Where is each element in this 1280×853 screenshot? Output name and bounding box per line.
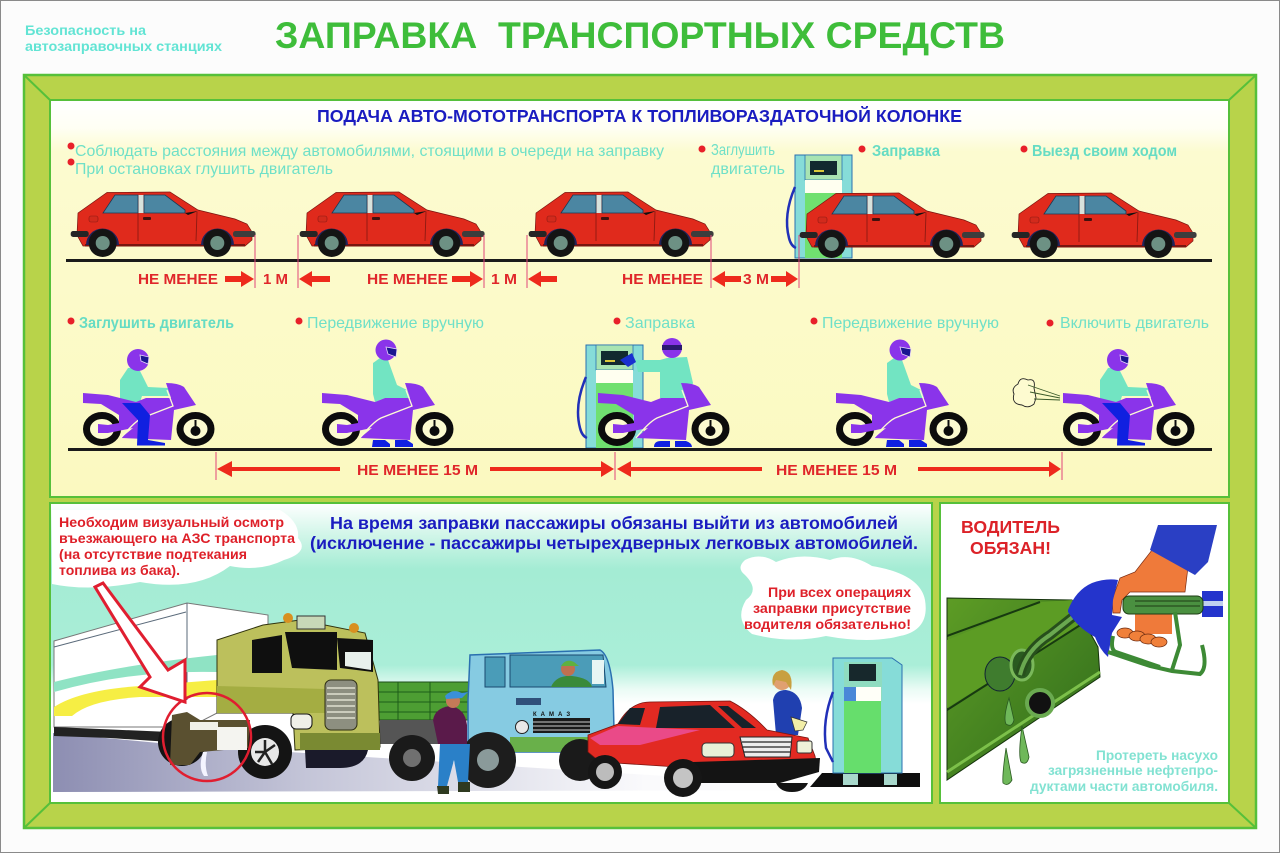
car row instructions: Заправка [872,143,940,160]
car 4 at pump [800,193,985,258]
icon: fuel pump, car row [787,155,852,258]
car row instructions: При остановках глушить двигатель [75,161,333,178]
icon: exhaust cloud [1013,379,1060,407]
wipe instruction text: дуктами части автомобиля. [1030,779,1218,794]
trailer truck [54,603,268,766]
passengers heading [310,513,918,553]
subtitle: series label: Безопасность на [25,23,147,38]
heading: driver must [961,517,1060,558]
big pointer arrow [95,583,185,702]
inspected fuel tank [170,712,250,776]
panel heading: ПОДАЧА АВТО-МОТОТРАНСПОРТА К ТОПЛИВОРАЗДАТОЧНОЙ КОЛОНКЕ [317,105,962,126]
inspection callout text: Необходим визуальный осмотр [59,515,284,530]
car 2 [300,192,485,257]
olive truck cab [217,613,380,779]
motorcycle row instructions: Включить двигатель [1060,315,1209,332]
motorcycle row instructions [68,315,1209,332]
icon: fuel pump, motorcycle row [578,345,643,448]
distance markers between motorcycles: НЕ МЕНЕЕ 15 М [357,462,478,479]
panel: inspection and passengers [50,503,932,803]
road surface [53,733,900,792]
icon: large fuel pump [810,658,920,787]
subtitle: series label [25,23,223,54]
motorcycle row instructions: Заправка [625,315,695,332]
subtitle: series label: автозаправочных станциях [25,39,223,54]
green fuel tank [947,598,1100,784]
motorcycle 3: refuelling [598,338,726,447]
driver presence callout text: заправки присутствие [753,601,912,616]
car row instructions: Соблюдать расстояния между автомобилями, стоящими в очереди на заправку [75,143,664,160]
car row instructions [68,142,1177,178]
motorcycle row instructions: Заглушить двигатель [79,315,234,332]
car row road [66,259,1212,262]
distance markers between cars: НЕ МЕНЕЕ [367,271,448,288]
wipe instruction text: загрязненные нефтепро- [1048,763,1218,778]
car 5 leaving [1012,193,1197,258]
inspection callout text [59,515,296,578]
car row instructions: Заглушить [711,142,775,159]
distance markers between cars: 3 М [743,271,769,288]
driver presence callout text: При всех операциях [768,585,912,600]
green flatbed truck [360,682,478,781]
cloud: driver presence callout [740,556,926,640]
panel: driver must [940,503,1229,803]
driver presence callout text [744,585,912,632]
inspection callout text: топлива из бака). [59,563,180,578]
distance markers between cars: НЕ МЕНЕЕ [622,271,703,288]
man standing [433,691,470,794]
motorcycle row road [68,448,1212,451]
motorcycle 1: engine off [83,349,211,446]
panel: approach to fuel dispenser [50,100,1229,497]
wipe instruction text: Протереть насухо [1096,748,1218,763]
red inspection circle [163,693,251,781]
distance markers between cars: 1 М [263,271,288,288]
distance markers between motorcycles [216,452,1062,480]
heading: driver must: ВОДИТЕЛЬ [961,517,1060,537]
passengers heading: На время заправки пассажиры обязаны выйти из автомобилей [330,513,898,533]
driver presence callout text: водителя обязательно! [744,617,911,632]
heading: driver must: ОБЯЗАН! [970,538,1051,558]
fuel nozzle with hand [1020,525,1223,675]
motorcycle 5: engine on with exhaust [1013,349,1191,446]
distance markers between motorcycles: НЕ МЕНЕЕ 15 М [776,462,897,479]
distance markers between cars: НЕ МЕНЕЕ [138,271,218,288]
passengers heading: (исключение - пассажиры четырехдверных легковых автомобилей. [310,533,918,553]
car 3 [529,192,714,257]
title: ЗАПРАВКА ТРАНСПОРТНЫХ СРЕДСТВ [275,15,1005,56]
inspection callout text: въезжающего на АЗС транспорта [59,531,296,546]
KAMAZ blue truck [460,650,614,788]
motorcycle 4: pushed by hand [836,340,964,447]
inspection callout text: (на отсутствие подтекания [59,547,247,562]
woman with bag [772,670,807,735]
KAMAZ blue truck: КАМАЗ [533,712,574,718]
distance markers between cars [138,235,799,288]
car row instructions: двигатель [711,161,785,178]
car row instructions: Выезд своим ходом [1032,143,1177,160]
motorcycle row instructions: Передвижение вручную [307,315,484,332]
red sedan [588,701,820,797]
car 1 [71,192,256,257]
distance markers between cars: 1 М [491,271,517,288]
motorcycle 2: pushed by hand [322,340,450,447]
wipe instruction text [1030,748,1218,794]
cloud: inspection callout [52,510,302,588]
motorcycle row instructions: Передвижение вручную [822,315,999,332]
